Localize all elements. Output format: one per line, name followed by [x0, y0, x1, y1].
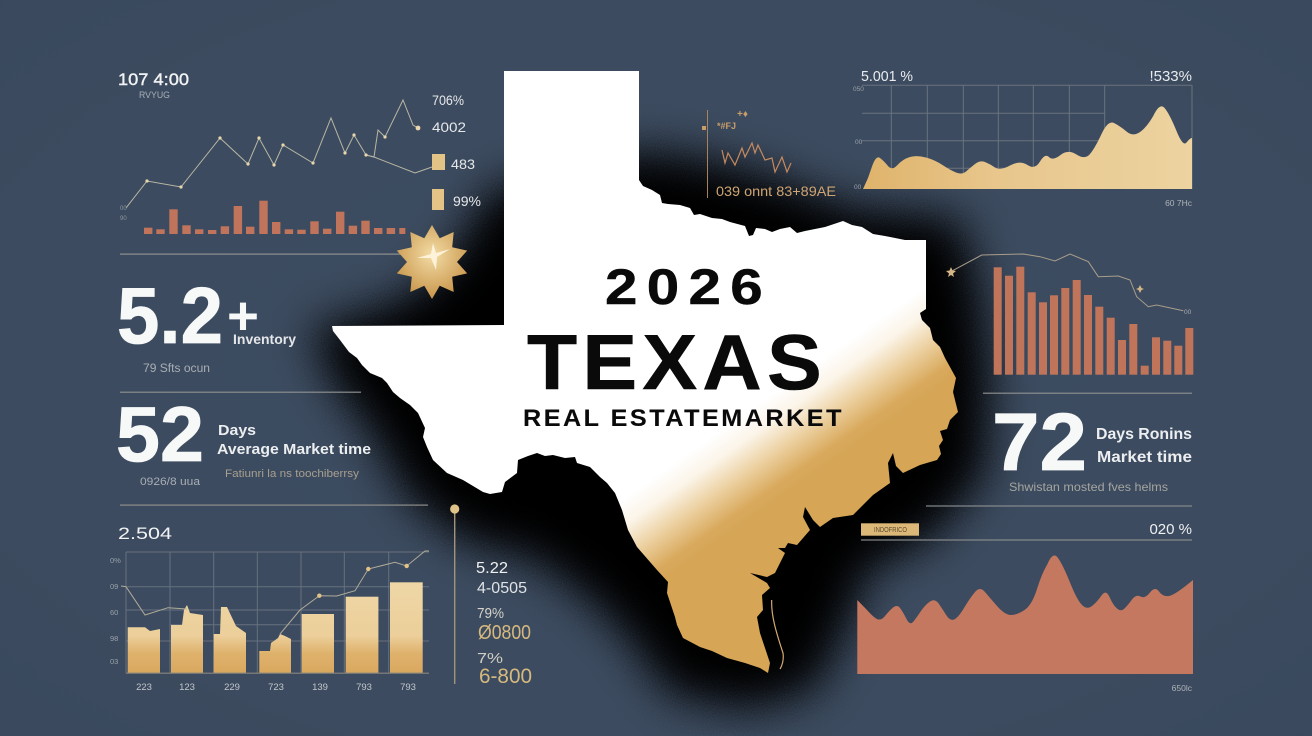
chart bars — [128, 582, 423, 673]
gold tag: INDOFRICO — [874, 527, 907, 534]
panel: bottom-right area chart — [857, 521, 1193, 693]
title subtitle: REAL ESTATEMARKET — [523, 405, 844, 432]
stat: average market time — [116, 390, 371, 488]
legend swatches — [432, 154, 445, 210]
area series — [863, 106, 1192, 189]
footnote: 60 7Hc — [1165, 198, 1193, 208]
panel caption: RVYUG — [139, 90, 170, 100]
y axis labels: 09 — [110, 582, 118, 591]
y axis labels: 00 — [854, 184, 862, 191]
left heading: 5.001 % — [861, 68, 913, 85]
divider — [120, 254, 410, 255]
x axis labels: 139 — [312, 682, 328, 693]
vertical rule — [454, 509, 455, 684]
map: Texas silhouette — [332, 71, 958, 673]
heading value: 020 % — [1149, 521, 1192, 538]
small marks: *#FJ — [717, 121, 736, 131]
x axis baseline — [126, 673, 429, 674]
divider — [120, 504, 428, 506]
panel: top-right area chart — [853, 68, 1193, 208]
stat label line two: Average Market time — [217, 441, 371, 458]
divider — [926, 505, 1192, 507]
legend values: 99% — [453, 193, 481, 209]
x axis labels: 723 — [268, 682, 284, 693]
bars — [994, 267, 1193, 375]
panel: center-left figures: Ø0800 — [478, 622, 531, 644]
panel: bottom-left bar chart — [110, 524, 429, 693]
axis labels: 90 — [120, 216, 127, 222]
stat label: Days Ronins — [1096, 426, 1192, 443]
stat label: Days — [218, 422, 256, 439]
stat: market time right — [992, 397, 1192, 494]
y axis labels: 03 — [110, 657, 118, 666]
divider — [983, 393, 1192, 394]
vertical rule — [707, 110, 708, 198]
stat label: Inventory — [233, 331, 296, 347]
stat: inventory — [117, 271, 296, 375]
panel: top-middle mini chart — [702, 109, 836, 199]
y axis labels: 00 — [855, 139, 863, 146]
panel: center-left figures — [450, 504, 532, 688]
icon: gold star badge — [397, 225, 467, 299]
stat caption: Fatiunri la ns toochiberrsy — [225, 468, 360, 480]
y axis labels: 60 — [110, 608, 118, 617]
trend line — [951, 254, 1183, 311]
title — [523, 259, 844, 432]
x axis labels: 793 — [400, 682, 416, 693]
panel: center-left figures: 79% — [477, 605, 504, 622]
line markers — [145, 126, 420, 189]
panel: center-left figures: 6-800 — [479, 665, 532, 688]
squiggle line — [722, 143, 791, 172]
stat plus sign: + — [227, 286, 259, 346]
stat caption: Shwistan mosted fves helms — [1009, 480, 1168, 494]
axis labels: 00 — [120, 206, 127, 212]
x axis labels: 793 — [356, 682, 372, 693]
stat caption: 79 Sfts ocun — [143, 363, 210, 375]
chart grid — [126, 552, 429, 673]
legend values: 4002 — [432, 119, 466, 135]
x axis labels: 123 — [179, 682, 195, 693]
bars — [144, 201, 405, 234]
divider — [120, 392, 361, 393]
stat value: 52 — [116, 390, 204, 478]
area series — [857, 556, 1193, 674]
legend values — [432, 92, 481, 209]
panel: center-left figures: 4-0505 — [477, 580, 527, 597]
y axis labels — [110, 556, 121, 666]
dark halo behind Texas — [310, 150, 990, 710]
legend values: 706% — [432, 92, 464, 108]
stat sub caption: 0926/8 uua — [140, 476, 201, 488]
panel: right bar chart — [946, 254, 1193, 375]
footnote: 650lc — [1172, 683, 1193, 693]
x axis labels: 223 — [136, 682, 152, 693]
x axis labels: 229 — [224, 682, 240, 693]
panel heading: 107 4:00 — [118, 70, 189, 89]
trend markers — [946, 267, 1144, 293]
title state: TEXAS — [527, 318, 827, 406]
small marks — [702, 109, 748, 131]
gold tag — [861, 523, 919, 536]
chart grid — [862, 85, 1192, 189]
y axis labels — [853, 86, 864, 191]
figures: 5.22 — [476, 560, 508, 577]
x axis labels — [136, 682, 416, 693]
right heading: !533% — [1149, 68, 1192, 85]
caption: 039 onnt 83+89AE — [716, 183, 836, 199]
legend values: 483 — [451, 156, 475, 172]
y axis labels: 0% — [110, 556, 121, 565]
trend end label: 00 — [1184, 309, 1192, 316]
y axis labels: 98 — [110, 634, 118, 643]
y axis labels: 050 — [853, 86, 864, 93]
line series — [126, 100, 432, 208]
small marks: +♦ — [737, 109, 748, 120]
panel: top-left line and bar chart — [118, 70, 481, 234]
rule marker — [450, 504, 459, 514]
stat value: 72 — [992, 397, 1087, 488]
title year: 2026 — [605, 259, 772, 315]
panel: center-left figures: 7% — [477, 650, 503, 667]
axis labels — [120, 206, 127, 222]
panel heading: 2.504 — [118, 524, 172, 543]
river line — [772, 600, 783, 669]
divider line — [861, 539, 1192, 541]
stat value: 5.2 — [117, 271, 223, 360]
chart line — [121, 551, 429, 634]
stat label line two: Market time — [1097, 449, 1192, 466]
